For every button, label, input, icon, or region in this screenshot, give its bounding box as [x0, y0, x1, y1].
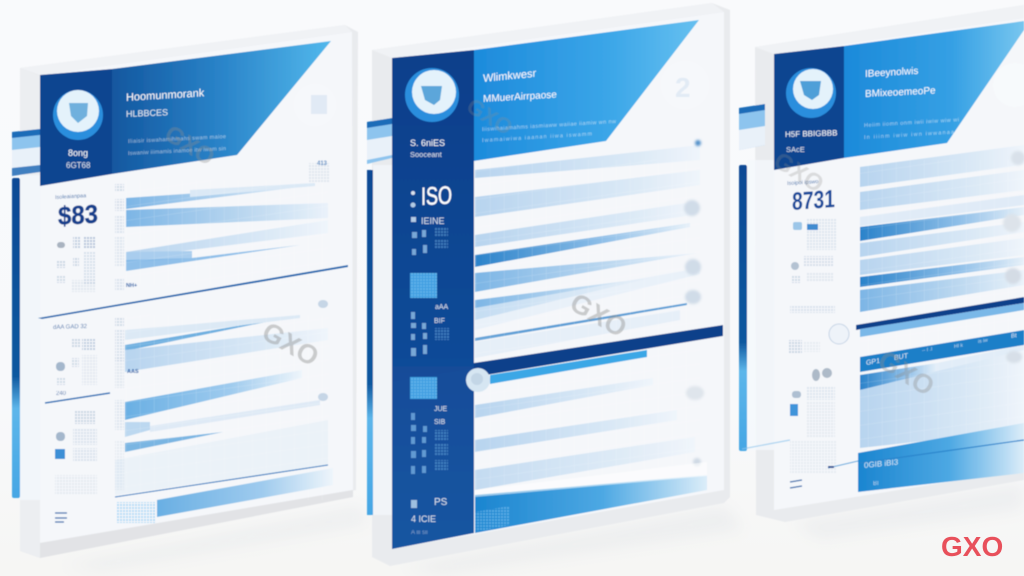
panel 3 light band — [860, 303, 1024, 337]
panel 1 header text: Iliaisir iswahamihmahs swam maioe — [128, 134, 226, 145]
panel 1 left stats lower: dAA GAD 32 — [53, 324, 88, 331]
panel 3 bottom band — [858, 423, 1024, 492]
panel 3 left stats — [787, 179, 858, 488]
panel 1 left stats upper: NH+ — [126, 283, 137, 289]
panel 2 sidebar stats: 4 ICIE — [411, 514, 436, 524]
panel 2 header text: Iwamaiwiwa iaanan iiwa iswamm — [482, 131, 592, 144]
panel 3 slab — [755, 5, 1024, 522]
panel 3 labelled band: BUT — [894, 353, 909, 362]
panel 1 value: $83 — [58, 199, 98, 231]
panel 3 header text: H5F BBIGBBB — [785, 128, 837, 139]
panel 2 header — [474, 20, 699, 161]
panel 1 left stats lower — [53, 300, 328, 495]
panel 3 labelled band: -- I .I — [922, 346, 932, 354]
panel 3 header watermark: GXO — [769, 147, 828, 198]
panel 2 sidebar stats: IEINE — [421, 216, 445, 226]
panel 3 labelled band: GP1 — [866, 358, 880, 367]
panel 2 sidebar stats: A iii sii — [411, 530, 428, 536]
panel 1 header text: Hoomunmorank — [126, 87, 205, 104]
panel 2 row dots — [684, 140, 704, 466]
panel 1 left stats upper: 413 — [317, 161, 328, 167]
panel 2 sidebar stats: JUE — [434, 406, 448, 413]
panel 1 left stats lower: AAS — [127, 369, 139, 375]
panel 1 header text: Iswaniw iiimamis inamoe itw iwam sin — [128, 146, 226, 157]
panel 3 left stats: Isoipoi ipswo — [787, 179, 818, 187]
panel 1 shadow — [60, 505, 370, 572]
panel 2 watermark: GXO — [565, 287, 632, 343]
panel 2 shadow — [400, 505, 745, 575]
panel 3 labelled band — [860, 330, 1024, 372]
panel 3 shadow — [790, 482, 1024, 540]
panel 3 value: 8731 — [792, 185, 835, 216]
panel 3 dark band — [856, 297, 1024, 330]
panel 3 chart rows — [860, 145, 1024, 450]
panel 2 value: ISO — [421, 181, 452, 211]
panel 2 header text: Sooceant — [410, 150, 443, 159]
panel 2 header text: MMuerAirrpaose — [483, 90, 557, 105]
panel 3 header text — [785, 66, 959, 154]
panel 3 row dots — [1003, 151, 1024, 363]
panel 2 ghost badge: 2 — [675, 72, 691, 103]
panel 2 sidebar stats: BIF — [434, 318, 445, 325]
panel 1 header text: 8ong — [68, 148, 88, 158]
panel 1 slab — [20, 25, 358, 558]
panel 2 header text: Wlimkwesr — [483, 68, 536, 85]
panel 1 divider upper — [38, 265, 348, 319]
panel 3 ghost badge — [993, 63, 1024, 107]
panel 1 chart rows lower — [115, 315, 329, 500]
panel 3 bottom band: BI — [873, 481, 879, 487]
panel 3 header text: Heiim iiomn onm iwii iwiw wiw wi — [864, 117, 959, 129]
panel 3 icon circle — [786, 68, 836, 118]
panel 3 glass outline — [742, 440, 790, 449]
panel 3 back tab — [739, 104, 774, 451]
panel 2 ghost badge — [661, 61, 709, 109]
panel 1 icon circle — [53, 90, 103, 140]
panel 2 light band — [490, 350, 647, 384]
panel 1 header text: HLBBCES — [126, 107, 168, 119]
logo: GXO: GXO — [941, 531, 1003, 562]
panel: right — [739, 5, 1024, 540]
panel 3 header text: In iiinm iwiw iwn iwwanaa — [864, 130, 955, 141]
panel 1 header watermark: GXO — [160, 120, 219, 171]
panel 3 watermark: GXO — [873, 345, 940, 402]
panel 2 icon circle — [405, 68, 459, 122]
panel 3 labelled band: is iw — [978, 337, 988, 345]
panel 1 back tab — [12, 129, 40, 500]
panel 2 sidebar stats: PS — [434, 497, 448, 508]
panel: middle — [367, 3, 745, 575]
panel 3 labelled band: Bt — [1011, 333, 1017, 340]
panel 3 header text: SAcE — [786, 145, 805, 154]
panel 2 dark band — [474, 325, 723, 377]
panel 2 header text: Iiiswihaiamahms iasmiaww waiiae iiamiw wn nw — [482, 119, 616, 133]
panel 2 chart rows — [475, 145, 700, 490]
panel 1 left stats upper: Isoleaianpaa — [55, 193, 87, 201]
panel: left — [12, 25, 370, 572]
panel 1 ghost badge — [294, 84, 336, 126]
panel 3 labelled band: HI k — [954, 343, 963, 350]
panel 3 header text: IBeeynolwis — [865, 66, 918, 80]
panel 3 bottom band: 0GIB iBI3 — [864, 458, 899, 470]
panel 1 header — [40, 41, 331, 186]
panel 2 sidebar stats: aAA — [435, 304, 449, 311]
panel 1 header text — [66, 87, 226, 170]
panel 2 header text: S. 6niES — [410, 138, 445, 148]
panel 2 bottom band — [475, 462, 707, 533]
panel 2 sidebar stats — [410, 191, 449, 536]
panel 2 sidebar stats: SIB — [434, 419, 446, 426]
panel 3 header text: BMixeoemeoPe — [865, 85, 936, 100]
panel 1 watermark: GXO — [257, 316, 324, 372]
panel 2 header text — [410, 68, 616, 159]
panel 2 sidebar — [392, 50, 474, 549]
panel 2 slab — [372, 3, 730, 566]
panel 2 connector node — [466, 368, 490, 392]
panel 1 left stats lower: 240 — [56, 391, 67, 397]
panel 3 header — [774, 21, 1024, 170]
panel 1 left stats upper — [55, 161, 329, 292]
panel 1 header text: 6GT68 — [66, 161, 91, 170]
panel 1 divider lower — [45, 393, 110, 403]
panel 2 header watermark: GXO — [462, 93, 517, 140]
panel 1 bottom bar — [55, 465, 333, 523]
panel 2 back tab — [367, 118, 392, 515]
panel 1 chart rows upper — [114, 180, 328, 285]
